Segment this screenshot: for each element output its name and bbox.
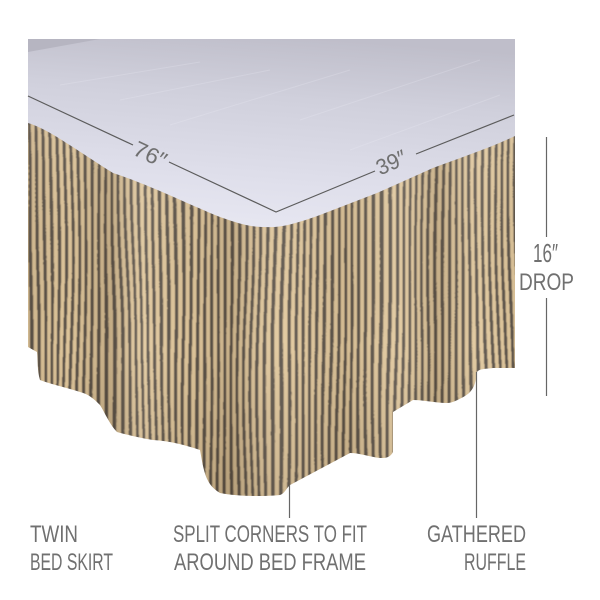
panel: striped bed skirt — [28, 123, 515, 496]
fabric stripes — [28, 123, 515, 496]
caption: split corners: AROUND BED FRAME — [174, 549, 366, 576]
caption: twin bed skirt: BED SKIRT — [30, 549, 113, 576]
label: 39 inches: 39″ — [372, 145, 411, 180]
label: 76 inches: 76″ — [130, 136, 171, 173]
drop measurement line — [546, 137, 548, 396]
fabric fold shading — [28, 120, 515, 500]
label: drop: DROP — [519, 269, 574, 296]
caption: gathered ruffle — [427, 521, 526, 576]
dimension line: 76 inch — [28, 96, 514, 212]
fabric vertical shading — [28, 120, 515, 500]
caption: split corners: SPLIT CORNERS TO FIT — [173, 521, 367, 548]
caption: split corners — [173, 521, 367, 576]
caption: gathered ruffle: RUFFLE — [464, 549, 526, 576]
label: 16 inch: 16″ — [533, 238, 558, 268]
leader line: gathered ruffle — [476, 372, 478, 518]
caption: gathered ruffle: GATHERED — [427, 521, 526, 548]
leader line: split corners — [288, 485, 290, 518]
caption: twin bed skirt: TWIN — [30, 521, 78, 548]
caption: twin bed skirt — [30, 521, 113, 576]
panel: mattress top sheet — [28, 39, 515, 240]
